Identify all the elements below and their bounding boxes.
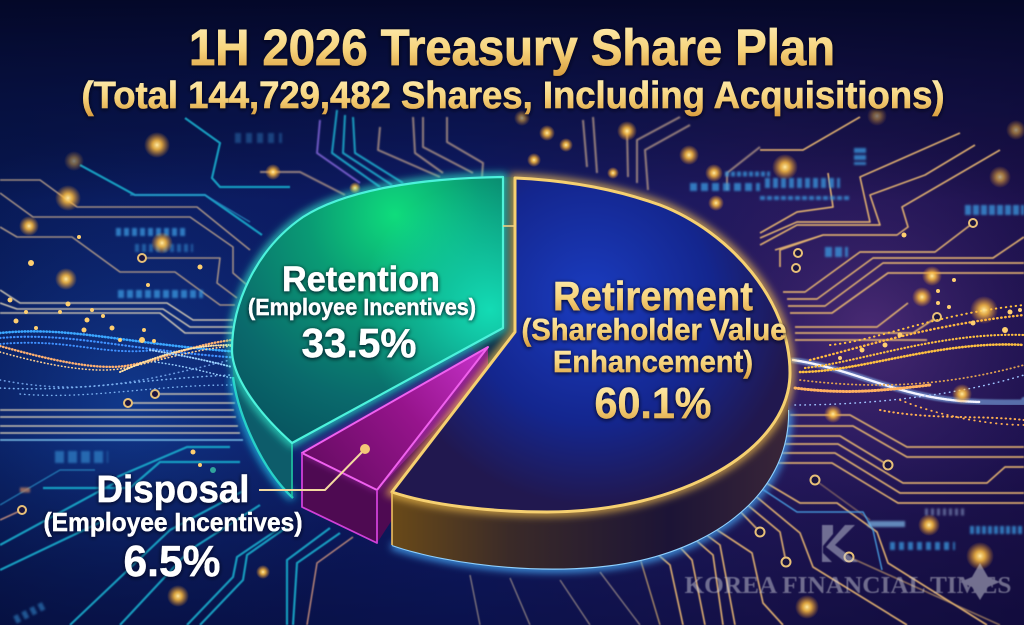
gap between slices	[470, 177, 516, 372]
label: retention	[248, 260, 476, 366]
label: retirement	[522, 273, 786, 428]
label: retirement: (Shareholder Value	[522, 312, 786, 347]
callout: disposal leader line	[259, 444, 370, 490]
label: retirement: Retirement	[553, 273, 753, 319]
slice: retirement (blue)	[392, 178, 790, 545]
label: disposal: Disposal	[96, 469, 250, 511]
label: retention: 33.5%	[302, 320, 416, 366]
circuit traces: top centre	[260, 110, 760, 195]
circuit traces: left	[0, 118, 353, 625]
label: disposal: 6.5%	[124, 537, 220, 586]
subtitle: (Total 144,729,482 Shares, Including Acquisitions)	[82, 75, 944, 117]
label: retirement: 60.1%	[594, 379, 712, 428]
label: disposal: (Employee Incentives)	[44, 507, 302, 537]
watermark: Korea Financial Times: KOREA FINANCIAL TIMES	[684, 573, 1012, 599]
label: retention: (Employee Incentives)	[248, 294, 476, 320]
circuit traces: right	[655, 117, 1024, 625]
title: 1H 2026 Treasury Share Plan	[189, 19, 835, 76]
watermark logo	[822, 525, 858, 562]
slice: retention (green)	[232, 177, 503, 498]
circuit traces: lower accent	[470, 483, 882, 625]
dotted light waves	[0, 305, 1024, 425]
pie base outer rim	[392, 410, 788, 569]
circuit nodes	[18, 219, 977, 566]
connector line between slices	[503, 225, 515, 227]
label: disposal	[44, 469, 302, 586]
blurred data glyph patches	[15, 138, 1024, 620]
slice: retirement side wall (gold)	[392, 370, 788, 569]
pie chart	[232, 177, 790, 569]
watermark sparkle	[960, 563, 1000, 600]
slice: disposal (magenta)	[302, 347, 488, 543]
title	[82, 19, 944, 117]
label: retention: Retention	[282, 260, 440, 299]
label: retirement: Enhancement)	[553, 344, 753, 379]
watermark: Korea Financial Times	[684, 525, 1012, 600]
